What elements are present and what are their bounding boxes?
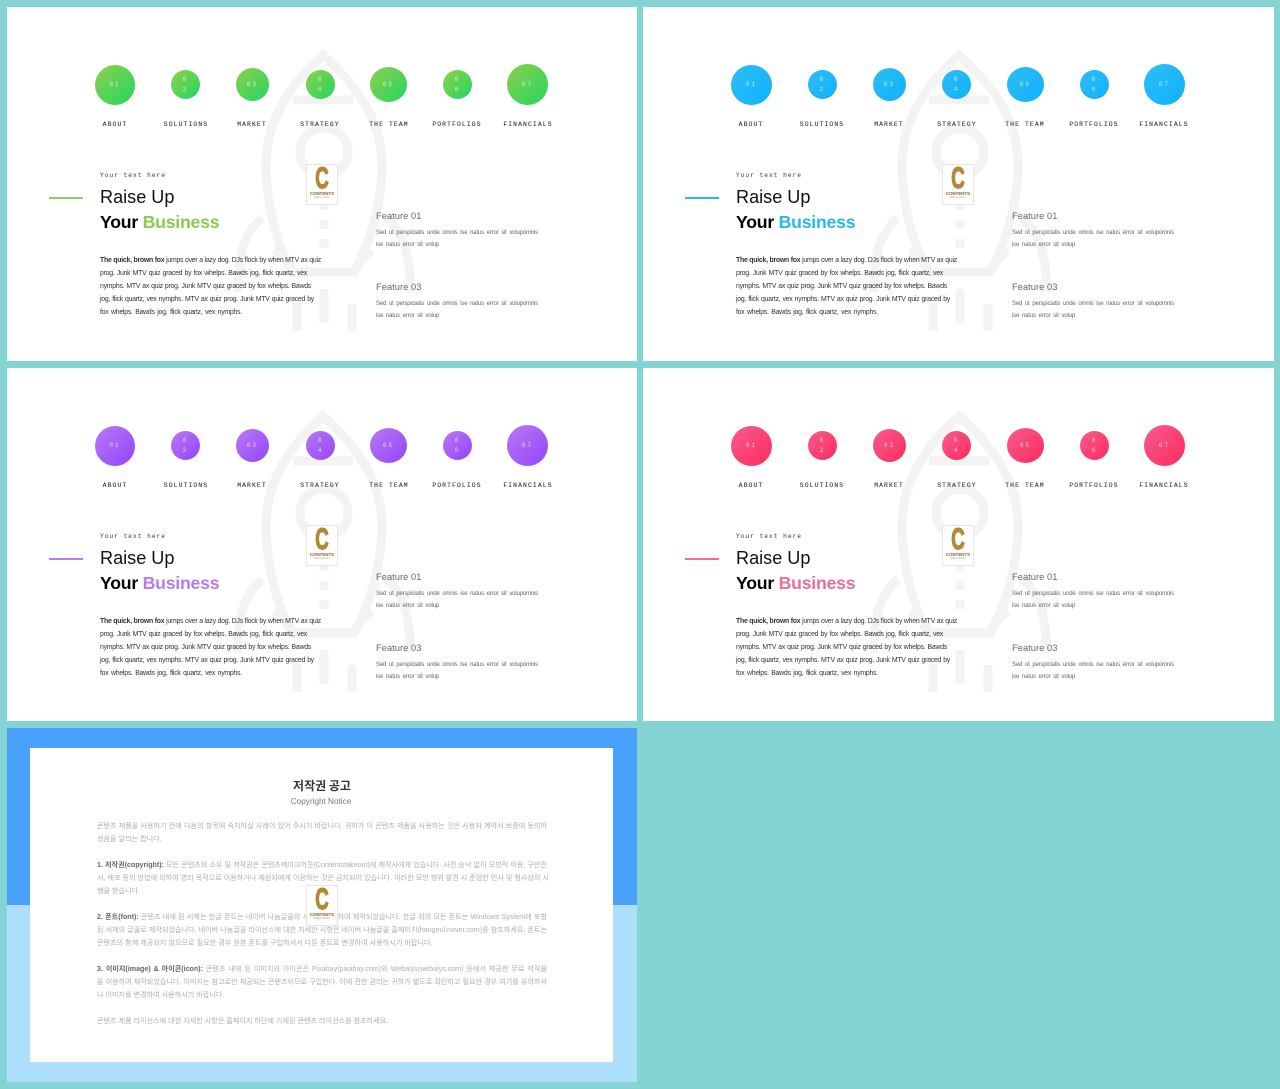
- body line 4: jog, flick quartz, vex nymphs. MTV ax quiz prog. Junk MTV quiz graced by: [100, 296, 314, 302]
- body line 1: The quick, brown fox jumps over a lazy dog. DJs flock by when MTV ax quiz: [100, 618, 321, 624]
- label solutions: SOLUTIONS: [800, 482, 844, 489]
- body line 5: fox whelps. Bawds jog, flick quartz, vex nymphs.: [100, 308, 242, 316]
- feature 03 text line 1: Sed ut perspiciatis unde omnis ise natus error sit volupomnis: [376, 301, 538, 307]
- label strategy: STRATEGY: [300, 121, 340, 128]
- step circle 02: [808, 70, 837, 99]
- feature 03 text line 2: ise natus error sit volup: [1012, 674, 1075, 680]
- logo: REAL LOGO: [951, 557, 965, 560]
- heading line 1: Raise Up: [100, 548, 174, 568]
- step circle 04: [306, 70, 335, 99]
- logo: REAL LOGO: [315, 557, 329, 560]
- label market: MARKET: [874, 482, 904, 489]
- step circle 01: [731, 65, 772, 105]
- step circle 03: 03: [247, 80, 258, 88]
- logo: CONTENTS: [946, 552, 970, 557]
- label portfolios: PORTFOLIOS: [1069, 482, 1119, 489]
- step circle 06: 0: [455, 76, 460, 82]
- step circle 04: [942, 70, 971, 99]
- logo: [942, 525, 974, 566]
- image clause line 2: 을 이용하여 제작되었습니다. 이미지는 참고로만 제공되는 콘텐츠이므로 구입한다. 이에 관한 권리는 귀하가 별도로 확인하고 필요한 경우 여기를 유의하셔: [97, 978, 547, 986]
- heading line 1: Raise Up: [736, 187, 810, 207]
- copyright clause line 1: 1. 저작권(copyright): 모든 콘텐츠의 소유 및 저작권은 콘텐츠메이크어웃(Contentstakeout)에 제작사에게 있습니다. 사전 승낙 없이 모방적 이용, 구만전: [97, 861, 547, 869]
- body line 1: The quick, brown fox jumps over a lazy dog. DJs flock by when MTV ax quiz: [736, 618, 957, 624]
- step circle 01: [95, 426, 135, 466]
- feature 03 text line 2: ise natus error sit volup: [376, 313, 439, 319]
- body line 1: The quick, brown fox jumps over a lazy dog. DJs flock by when MTV ax quiz: [100, 256, 321, 264]
- feature 01 heading: Feature 01: [1012, 572, 1057, 582]
- step circle 01: 01: [109, 81, 121, 88]
- eyebrow text: Your text here: [736, 533, 802, 540]
- step circle 02: 0: [183, 436, 188, 444]
- step circle 07: 07: [522, 442, 533, 448]
- step circle 06: [443, 431, 472, 460]
- label solutions: SOLUTIONS: [164, 482, 208, 489]
- icon: rocket watermark: [870, 49, 1050, 331]
- label market: MARKET: [874, 121, 904, 128]
- body line 5: fox whelps. Bawds jog, flick quartz, vex nymphs.: [100, 670, 242, 676]
- label financials: FINANCIALS: [503, 482, 553, 489]
- heading line 2: Your Business: [736, 573, 855, 593]
- logo: [306, 885, 338, 926]
- notice intro line 1: 콘텐츠 제품을 사용하기 전에 다음의 항목에 숙지하실 사례이 있어 주시기 바랍니다. 귀하가 이 콘텐츠 제품을 사용하는 것은 사용자 계약서 보증에 동의하: [97, 822, 547, 830]
- eyebrow text: Your text here: [100, 533, 166, 540]
- feature 01 heading: Feature 01: [376, 572, 421, 582]
- body line 3: nymphs. MTV ax quiz prog. Junk MTV quiz graced by fox whelps. Bawds: [736, 644, 947, 650]
- step circle 03: [236, 429, 269, 462]
- step circle 01: 01: [746, 81, 757, 88]
- copyright clause line 3: 행을 받습니다.: [97, 887, 140, 895]
- logo: [306, 525, 338, 566]
- panel: pink variant: [643, 368, 1274, 721]
- step circle 02: 0: [820, 76, 825, 82]
- step circle 07: [507, 64, 548, 105]
- feature 01 text line 1: Sed ut perspiciatis unde omnis ise natus error sit volupomnis: [1012, 591, 1174, 597]
- step circle 05: 05: [383, 80, 394, 88]
- step circle 03: 03: [884, 80, 895, 88]
- feature 01 text line 1: Sed ut perspiciatis unde omnis ise natus error sit volupomnis: [376, 591, 538, 597]
- step circle 01: [731, 426, 772, 466]
- step circle 02: 0: [183, 76, 188, 82]
- feature 03 text line 1: Sed ut perspiciatis unde omnis ise natus error sit volupomnis: [376, 662, 538, 668]
- feature 03 heading: Feature 03: [376, 643, 421, 653]
- label market: MARKET: [237, 482, 267, 489]
- step circle 03: 03: [247, 442, 258, 448]
- step circle 06: 6: [1092, 446, 1097, 454]
- feature 03 text line 2: ise natus error sit volup: [1012, 313, 1075, 319]
- body line 5: fox whelps. Bawds jog, flick quartz, vex nymphs.: [736, 308, 878, 316]
- label the team: THE TEAM: [1005, 482, 1045, 489]
- panel: copyright notice: [7, 728, 637, 1082]
- step circle 07: [507, 425, 548, 466]
- step circle 01: 01: [746, 442, 757, 449]
- notice heading: 저작권 공고: [293, 777, 351, 794]
- label portfolios: PORTFOLIOS: [432, 121, 482, 128]
- accent line: [685, 196, 719, 198]
- step circle 06: 6: [455, 446, 460, 454]
- feature 03 text line 1: Sed ut perspiciatis unde omnis ise natus error sit volupomnis: [1012, 301, 1174, 307]
- step circle 04: 4: [318, 446, 323, 454]
- body line 2: prog. Junk MTV quiz graced by fox whelps. Bawds jog, flick quartz, vex: [736, 630, 943, 638]
- step circle 06: [1080, 70, 1109, 99]
- step circle 06: 6: [455, 86, 460, 92]
- step circle 04: 4: [954, 446, 959, 454]
- panel: purple variant: [7, 368, 637, 721]
- step circle 05: 05: [383, 442, 394, 448]
- step circle 05: [1007, 67, 1044, 102]
- logo: REAL LOGO: [951, 196, 965, 199]
- logo: CONTENTS: [310, 912, 334, 917]
- heading line 1: Raise Up: [736, 548, 810, 568]
- feature 03 heading: Feature 03: [376, 282, 421, 292]
- feature 03 heading: Feature 03: [1012, 643, 1057, 653]
- label about: ABOUT: [103, 121, 127, 128]
- step circle 05: [1007, 428, 1044, 463]
- logo: [306, 164, 338, 205]
- feature 01 text line 1: Sed ut perspiciatis unde omnis ise natus error sit volupomnis: [1012, 230, 1174, 236]
- copyright clause line 2: 시, 배포 등의 방법에 의하여 영리 목적으로 이용하거나 제삼자에게 이용하는 것은 금지되어 있습니다. 이러한 모방 행위 발견 시 준엄한 민사 및 형사상의 시: [97, 874, 549, 882]
- image clause line 3: 나 이미지를 변경하여 사용하시기 바랍니다.: [97, 991, 224, 999]
- font clause line 3: 콘텐츠의 함께 제공되지 않으므로 필요한 경우 원본 폰트를 구입하셔서 다른 폰트로 변경하여 사용하시기 바랍니다.: [97, 939, 433, 947]
- feature 03 heading: Feature 03: [1012, 282, 1057, 292]
- panel: green variant: [7, 7, 637, 361]
- step circle 04: 0: [318, 436, 323, 444]
- step circle 07: 07: [522, 80, 533, 88]
- label financials: FINANCIALS: [1139, 482, 1189, 489]
- step circle 02: [171, 70, 200, 99]
- step circle 07: [1144, 425, 1185, 466]
- step circle 06: 6: [1092, 86, 1097, 92]
- body line 3: nymphs. MTV ax quiz prog. Junk MTV quiz graced by fox whelps. Bawds: [100, 282, 311, 290]
- label market: MARKET: [237, 121, 267, 128]
- step circle 05: [370, 428, 407, 463]
- step circle 07: [1144, 64, 1185, 105]
- step circle 06: 0: [455, 436, 460, 444]
- step circle 04: 0: [954, 76, 959, 82]
- step circle 02: [171, 431, 200, 460]
- accent line: [49, 558, 83, 560]
- feature 01 text line 2: ise natus error sit volup: [1012, 603, 1075, 609]
- image clause line 1: 3. 이미지(image) & 아이콘(icon): 콘텐츠 내에 된 이미지와 아이콘은 Pixabay(pixabay.com)와 Webalys(webalys.com) 등에서 제공한 무료 저작물: [97, 965, 547, 973]
- step circle 04: [306, 431, 335, 460]
- feature 01 text line 2: ise natus error sit volup: [376, 242, 439, 248]
- label the team: THE TEAM: [369, 121, 409, 128]
- body line 3: nymphs. MTV ax quiz prog. Junk MTV quiz graced by fox whelps. Bawds: [736, 282, 947, 290]
- label about: ABOUT: [739, 121, 763, 128]
- label strategy: STRATEGY: [937, 121, 977, 128]
- accent line: [49, 196, 83, 198]
- body line 2: prog. Junk MTV quiz graced by fox whelps. Bawds jog, flick quartz, vex: [100, 270, 307, 276]
- step circle 07: 07: [1159, 80, 1170, 88]
- body line 4: jog, flick quartz, vex nymphs. MTV ax quiz prog. Junk MTV quiz graced by: [736, 296, 950, 302]
- body line 4: jog, flick quartz, vex nymphs. MTV ax quiz prog. Junk MTV quiz graced by: [100, 656, 314, 664]
- step circle 04: 0: [954, 436, 959, 444]
- panel: blue variant: [643, 7, 1274, 361]
- body line 5: fox whelps. Bawds jog, flick quartz, vex nymphs.: [736, 670, 878, 676]
- label strategy: STRATEGY: [937, 482, 977, 489]
- label portfolios: PORTFOLIOS: [432, 482, 482, 489]
- body line 4: jog, flick quartz, vex nymphs. MTV ax quiz prog. Junk MTV quiz graced by: [736, 656, 950, 664]
- icon: rocket watermark: [234, 410, 414, 692]
- step circle 04: [942, 431, 971, 460]
- logo: CONTENTS: [310, 191, 334, 196]
- step circle 02: 2: [183, 446, 188, 454]
- feature 01 text line 1: Sed ut perspiciatis unde omnis ise natus error sit volupomnis: [376, 230, 538, 236]
- logo: [942, 164, 974, 205]
- label the team: THE TEAM: [369, 482, 409, 489]
- icon: rocket watermark: [234, 49, 414, 331]
- body line 3: nymphs. MTV ax quiz prog. Junk MTV quiz graced by fox whelps. Bawds: [100, 644, 311, 650]
- step circle 06: [1080, 431, 1109, 460]
- step circle 01: 01: [109, 442, 121, 449]
- eyebrow text: Your text here: [100, 172, 166, 179]
- feature 01 heading: Feature 01: [1012, 211, 1057, 221]
- logo: REAL LOGO: [315, 917, 329, 920]
- step circle 05: 05: [1020, 80, 1031, 88]
- feature 03 text line 2: ise natus error sit volup: [376, 674, 439, 680]
- step circle 02: [808, 431, 837, 460]
- step circle 05: [370, 67, 407, 102]
- label portfolios: PORTFOLIOS: [1069, 121, 1119, 128]
- step circle 06: [443, 70, 472, 99]
- step circle 02: 2: [820, 86, 825, 92]
- step circle 04: 4: [318, 86, 323, 92]
- logo: CONTENTS: [946, 191, 970, 196]
- step circle 06: 0: [1092, 436, 1097, 444]
- label solutions: SOLUTIONS: [164, 121, 208, 128]
- label strategy: STRATEGY: [300, 482, 340, 489]
- font clause line 2: 된 서체의 글꼴로 제작되었습니다. 네이버 나눔글꼴 라이선스에 대한 자세한 사항은 네이버 나눔글꼴 홈페이지(hangeul.naver.com)를 참조하세요. 폰트는: [97, 926, 547, 934]
- step circle 02: 2: [183, 86, 188, 92]
- feature 01 text line 2: ise natus error sit volup: [376, 603, 439, 609]
- label about: ABOUT: [739, 482, 763, 489]
- heading line 2: Your Business: [100, 212, 219, 232]
- step circle 02: 0: [820, 436, 825, 444]
- feature 01 text line 2: ise natus error sit volup: [1012, 242, 1075, 248]
- step circle 04: 0: [318, 76, 323, 82]
- step circle 01: [95, 65, 135, 105]
- label financials: FINANCIALS: [503, 121, 553, 128]
- label the team: THE TEAM: [1005, 121, 1045, 128]
- notice closing line: 콘텐츠 제품 라이선스에 대한 자세한 사항은 홈페이지 하단에 기재된 콘텐츠 라이선스를 참조하세요.: [97, 1017, 388, 1025]
- font clause line 1: 2. 폰트(font): 콘텐츠 내에 된 서체는 한글 폰트는 네이버 나눔글꼴의 서체를 사용하여 제작되었습니다. 한글 외의 모든 폰트는 Windows System에 포함: [97, 913, 547, 921]
- notice subheading: Copyright Notice: [291, 796, 351, 806]
- heading line 2: Your Business: [736, 212, 855, 232]
- step circle 03: 03: [884, 442, 895, 448]
- body line 2: prog. Junk MTV quiz graced by fox whelps. Bawds jog, flick quartz, vex: [100, 630, 307, 638]
- accent line: [685, 558, 719, 560]
- step circle 05: 05: [1020, 442, 1031, 448]
- step circle 06: 0: [1092, 76, 1097, 82]
- step circle 04: 4: [954, 86, 959, 92]
- label about: ABOUT: [103, 482, 127, 489]
- feature 03 text line 1: Sed ut perspiciatis unde omnis ise natus error sit volupomnis: [1012, 662, 1174, 668]
- step circle 02: 2: [820, 446, 825, 454]
- icon: rocket watermark: [870, 410, 1050, 692]
- notice intro line 2: 셨음을 알리는 합니다.: [97, 835, 162, 843]
- step circle 07: 07: [1159, 442, 1170, 448]
- eyebrow text: Your text here: [736, 172, 802, 179]
- logo: REAL LOGO: [315, 196, 329, 199]
- feature 01 heading: Feature 01: [376, 211, 421, 221]
- step circle 03: [873, 429, 906, 462]
- label solutions: SOLUTIONS: [800, 121, 844, 128]
- logo: CONTENTS: [310, 552, 334, 557]
- step circle 03: [236, 68, 269, 101]
- heading line 1: Raise Up: [100, 187, 174, 207]
- label financials: FINANCIALS: [1139, 121, 1189, 128]
- body line 2: prog. Junk MTV quiz graced by fox whelps. Bawds jog, flick quartz, vex: [736, 270, 943, 276]
- heading line 2: Your Business: [100, 573, 219, 593]
- step circle 03: [873, 68, 906, 101]
- notice card: [30, 748, 613, 1062]
- body line 1: The quick, brown fox jumps over a lazy dog. DJs flock by when MTV ax quiz: [736, 256, 957, 264]
